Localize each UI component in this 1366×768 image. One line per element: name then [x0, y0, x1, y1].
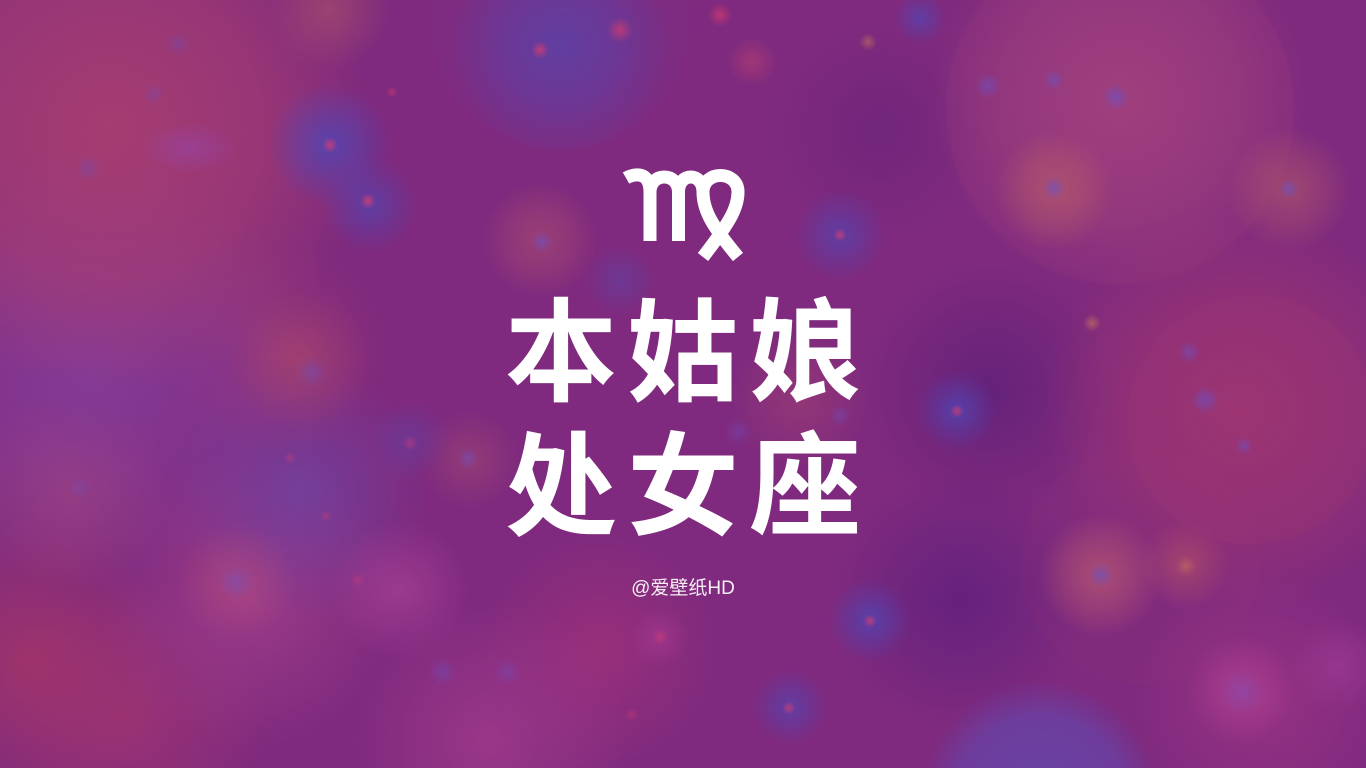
credit text: @爱壁纸HD: [631, 578, 735, 599]
icon: Virgo zodiac symbol: [622, 168, 744, 261]
title line 1: 本姑娘: [505, 291, 871, 416]
title line 2: 处女座: [505, 425, 871, 550]
